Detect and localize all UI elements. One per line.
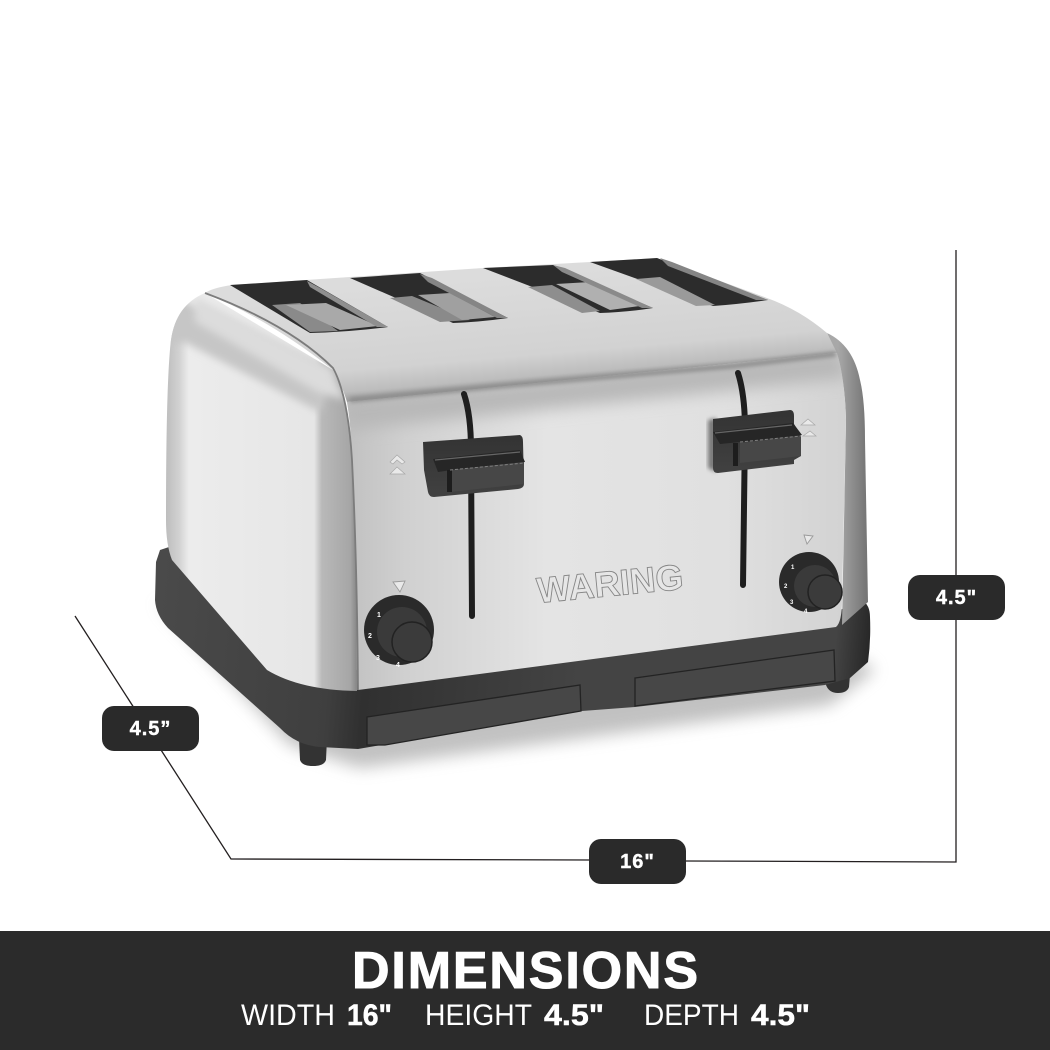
footer measurements: DEPTH	[644, 999, 739, 1032]
lever shadow	[708, 418, 716, 472]
footer measurements: HEIGHT	[425, 999, 532, 1032]
right lever	[713, 410, 802, 473]
right knob: 1	[791, 565, 795, 571]
toaster	[155, 258, 875, 768]
lever tracks	[464, 373, 745, 616]
side panel	[160, 290, 357, 691]
right knob: 2	[784, 584, 788, 590]
left knob	[364, 595, 434, 669]
front panel	[340, 350, 850, 690]
width label	[589, 839, 686, 884]
right knob	[779, 552, 842, 615]
left knob: 4	[396, 662, 400, 669]
width label: 16"	[620, 851, 655, 873]
dimension line: width and height	[686, 250, 956, 862]
footer measurements	[241, 999, 810, 1032]
height label	[908, 575, 1005, 620]
crease between top and front	[350, 354, 836, 400]
feet	[299, 675, 850, 766]
chevrons	[390, 419, 816, 474]
logo text: WARING	[535, 556, 685, 611]
depth label: 4.5”	[130, 718, 171, 740]
left knob: 2	[368, 633, 372, 640]
height label: 4.5"	[936, 587, 977, 609]
left lever	[423, 435, 525, 497]
toaster illustration and dimension lines	[74, 250, 957, 863]
footer measurements: WIDTH	[241, 999, 335, 1032]
knob markers	[393, 535, 813, 592]
base	[155, 545, 870, 749]
bread slot 3	[483, 265, 653, 313]
left knob: 1	[377, 612, 381, 619]
bread slot 4	[590, 258, 768, 306]
footer measurements: 16"	[347, 999, 392, 1032]
footer measurements: 4.5"	[544, 999, 604, 1032]
crumb trays	[367, 650, 835, 745]
footer measurements: 4.5"	[751, 999, 810, 1032]
left knob: 3	[376, 655, 380, 662]
footer band	[0, 931, 1050, 1050]
soft shadow	[155, 600, 875, 768]
bread slot 1	[230, 280, 388, 333]
top panel	[205, 258, 837, 402]
depth label	[102, 706, 199, 751]
right side band	[827, 333, 868, 625]
bread slot 2	[350, 273, 508, 323]
right knob: 4	[804, 609, 808, 615]
right knob: 3	[790, 600, 794, 606]
footer heading: DIMENSIONS	[352, 942, 698, 1000]
dimension line: depth	[75, 616, 590, 860]
side and front rim	[205, 293, 358, 690]
